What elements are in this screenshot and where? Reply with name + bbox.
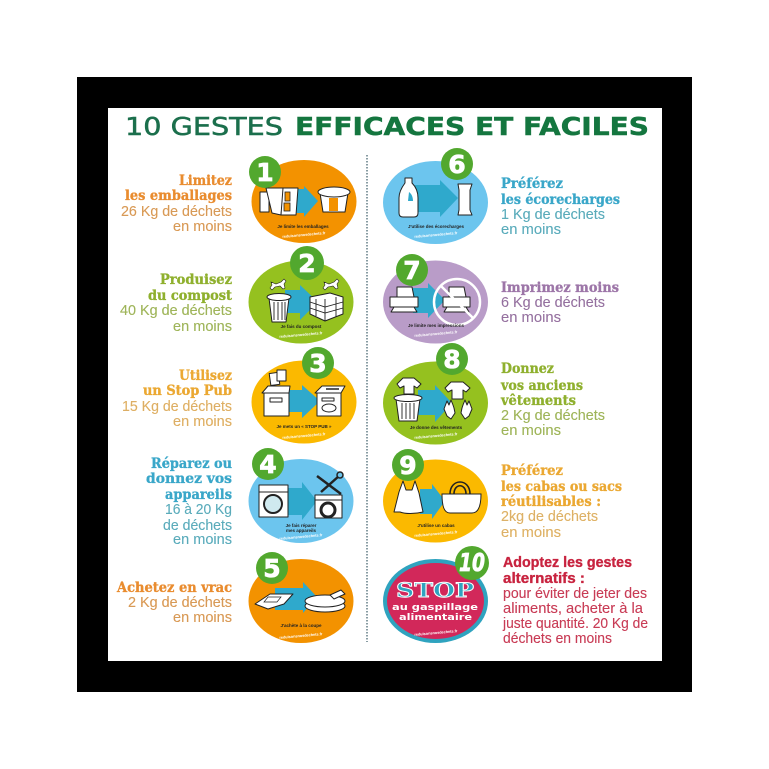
icon: reusable tub [318,187,350,212]
arrow 1 [285,186,318,217]
url 9: reduisonsnosdechets.fr [414,530,458,538]
caption 8: Je donne des vêtements [410,425,463,430]
arrow 4 [287,482,317,520]
badge 8: 8 [443,345,461,374]
panel: geste 1 text: en moins [173,218,232,235]
panel: geste 7 text: Imprimez moins [501,280,619,296]
panel: geste 3 text: un Stop Pub [143,383,232,399]
panel: geste 7 text: en moins [501,309,561,326]
icon: detergent bottle [399,178,418,217]
panel: geste 6 text: les écorecharges [501,192,620,208]
panel: geste 4 circle [248,448,354,543]
caption 1: Je limite les emballages [277,224,329,229]
panel: geste 1 circle [249,156,356,243]
panel: geste 2 text: Produisez [160,272,232,288]
badge 5: 5 [263,554,281,583]
icon: plastic bag [394,481,423,514]
title: 10 GESTES [125,112,283,141]
panel: geste 2 text: en moins [173,318,232,335]
arrow 2 [285,285,318,320]
url 7: reduisonsnosdechets.fr [414,330,458,338]
icon: loose product [305,590,345,612]
badge 6: 6 [448,150,466,179]
food waste text [392,603,478,623]
caption 3: Je mets un « STOP PUB » [276,424,332,429]
badge 9: 9 [399,451,417,480]
url 3: reduisonsnosdechets.fr [282,432,326,440]
black frame [77,77,692,692]
icon: packaging [260,188,298,215]
panel: geste 5 text: Achetez en vrac [116,580,232,596]
panel: geste 9 text: réutilisables : [501,494,601,510]
arrow 6 [415,180,458,217]
stop sign text: STOP [396,578,474,602]
panel: geste 1 text: Limitez [179,173,232,189]
panel: geste 10 text: aliments, acheter à la [503,600,644,617]
url 10: reduisonsnosdechets.fr [414,629,458,637]
icon: compost crate [310,279,343,321]
panel: geste 6 text [501,176,620,238]
caption 4: Je fais réparer [286,523,317,528]
arrow 5 [275,582,317,613]
panel: geste 10 circle [383,546,489,643]
panel: geste 6 text: en moins [501,221,561,238]
panel: geste 6 circle [383,148,488,244]
caption 9: J'utilise un cabas [417,523,455,528]
badge 2: 2 [298,249,316,278]
url 1: reduisonsnosdechets.fr [282,231,326,239]
url 5: reduisonsnosdechets.fr [279,632,323,640]
icon: shirt and bin [394,378,422,421]
panel: geste 4 text: appareils [165,487,232,503]
icon: reusable tote [442,482,481,513]
icon: trash can [267,279,291,322]
panel: geste 3 text [122,368,232,430]
icon: packaged tray [255,594,293,609]
panel: geste 1 text: 26 Kg de déchets [121,203,232,220]
url 6: reduisonsnosdechets.fr [414,231,458,239]
caption 7: Je limite mes impressions [408,323,465,328]
panel: geste 9 circle [383,449,488,542]
panel: geste 9 text: Préférez [501,463,563,479]
panel: geste 10 text: déchets en moins [503,630,612,647]
panel: geste 4 text: Réparez ou [151,456,232,472]
panel: geste 10 text: juste quantité. 20 Kg de [502,615,648,632]
panel: geste 10 text [502,554,648,647]
arrow 8 [418,385,452,422]
caption 4: mes appareils [286,528,316,533]
arrow 3 [288,385,320,418]
panel: geste 8 text: vos anciens [500,378,583,394]
panel: geste 5 text: en moins [173,609,232,626]
panel: geste 8 text: vêtements [500,393,576,409]
icon: mailbox with flyers [262,370,290,416]
icon: broken washing machine [259,485,288,517]
icon: tools and repaired machine [315,472,343,518]
url 8: reduisonsnosdechets.fr [414,432,458,440]
panel: geste 8 text [500,361,605,439]
panel: geste 10 text: alternatifs : [503,570,585,587]
panel: geste 9 text: 2kg de déchets [501,508,598,525]
panel: geste 5 text: 2 Kg de déchets [128,594,232,611]
panel: geste 10 text: Adoptez les gestes [503,554,632,571]
panel: geste 4 text: donnez vos [146,471,232,487]
panel: geste 3 text: 15 Kg de déchets [122,398,232,415]
arrow 7 [413,283,445,318]
panel: geste 8 text: 2 Kg de déchets [501,407,605,424]
icon: printer [390,287,418,312]
panel: geste 8 circle [383,343,488,444]
badge 10: 10 [459,548,485,577]
panel: geste 5 text [116,580,232,626]
panel: geste 4 text [146,456,232,548]
panel: geste 4 text: 16 à 20 Kg [165,501,232,518]
panel: geste 4 text: de déchets [163,517,232,534]
white poster panel [108,108,662,661]
caption 5: J'achète à la coupe [280,623,322,628]
panel: geste 7 text: 6 Kg de déchets [501,294,605,311]
icon: mailbox with stop pub [315,386,345,416]
icon: crossed-out printer [434,279,480,325]
caption 6: J'utilise des écorecharges [408,224,465,229]
panel: geste 9 text: les cabas ou sacs [501,479,622,495]
panel: geste 3 text: en moins [173,413,232,430]
badge 3: 3 [309,349,327,378]
arrow 9 [420,484,445,519]
url 4: reduisonsnosdechets.fr [279,533,323,541]
panel: geste 6 text: Préférez [501,176,563,192]
panel: geste 4 text: en moins [173,531,232,548]
panel: geste 3 circle [252,347,356,444]
panel: geste 5 circle [248,552,354,643]
caption 4 [286,523,317,533]
food waste text: alimentaire [399,613,472,623]
panel: geste 2 circle [248,246,354,344]
icon: shirt and hands [444,382,472,419]
badge 4: 4 [259,450,277,479]
title [125,112,649,141]
panel: geste 10 text: pour éviter de jeter des [503,585,647,602]
url 2: reduisonsnosdechets.fr [279,331,323,339]
title: EFFICACES ET FACILES [295,112,649,141]
panel: geste 2 text [120,272,233,335]
panel: geste 7 text [501,280,619,326]
badge 7: 7 [403,256,421,285]
panel: geste 7 circle [383,254,488,344]
icon: refill pouch [458,184,472,215]
panel: geste 9 text: en moins [501,524,561,541]
panel: geste 8 text: en moins [501,422,561,439]
panel: geste 6 text: 1 Kg de déchets [501,206,605,223]
panel: geste 2 text: 40 Kg de déchets [120,302,232,319]
badge 1: 1 [256,158,274,187]
panel: geste 2 text: du compost [148,288,233,304]
panel: geste 3 text: Utilisez [179,368,232,384]
panel: geste 8 text: Donnez [501,361,554,377]
panel: geste 9 text [501,463,622,541]
panel: geste 1 text [121,173,232,235]
panel: geste 1 text: les emballages [125,188,232,204]
food waste text: au gaspillage [392,603,478,613]
caption 2: Je fais du compost [281,324,322,329]
